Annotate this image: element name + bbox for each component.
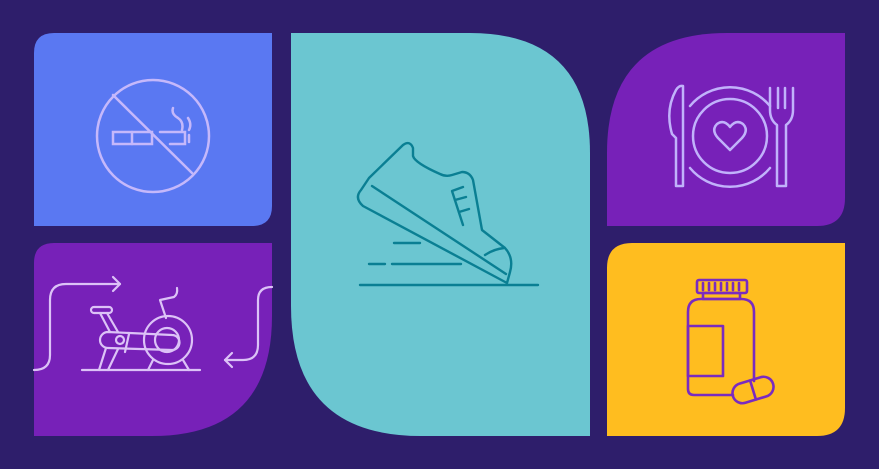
icon: exercise bike with arrows xyxy=(34,277,272,370)
icon: running shoe xyxy=(358,143,538,285)
panel: healthy eating xyxy=(607,33,845,226)
panel: no smoking xyxy=(34,33,272,226)
icon: pill bottle and capsule xyxy=(688,280,776,406)
icon: no smoking sign xyxy=(97,80,209,192)
icon: plate with heart, knife and fork xyxy=(669,86,793,187)
panel: exercise bike xyxy=(34,243,272,436)
panel: medication xyxy=(607,243,845,436)
panel: running shoe xyxy=(291,33,590,436)
